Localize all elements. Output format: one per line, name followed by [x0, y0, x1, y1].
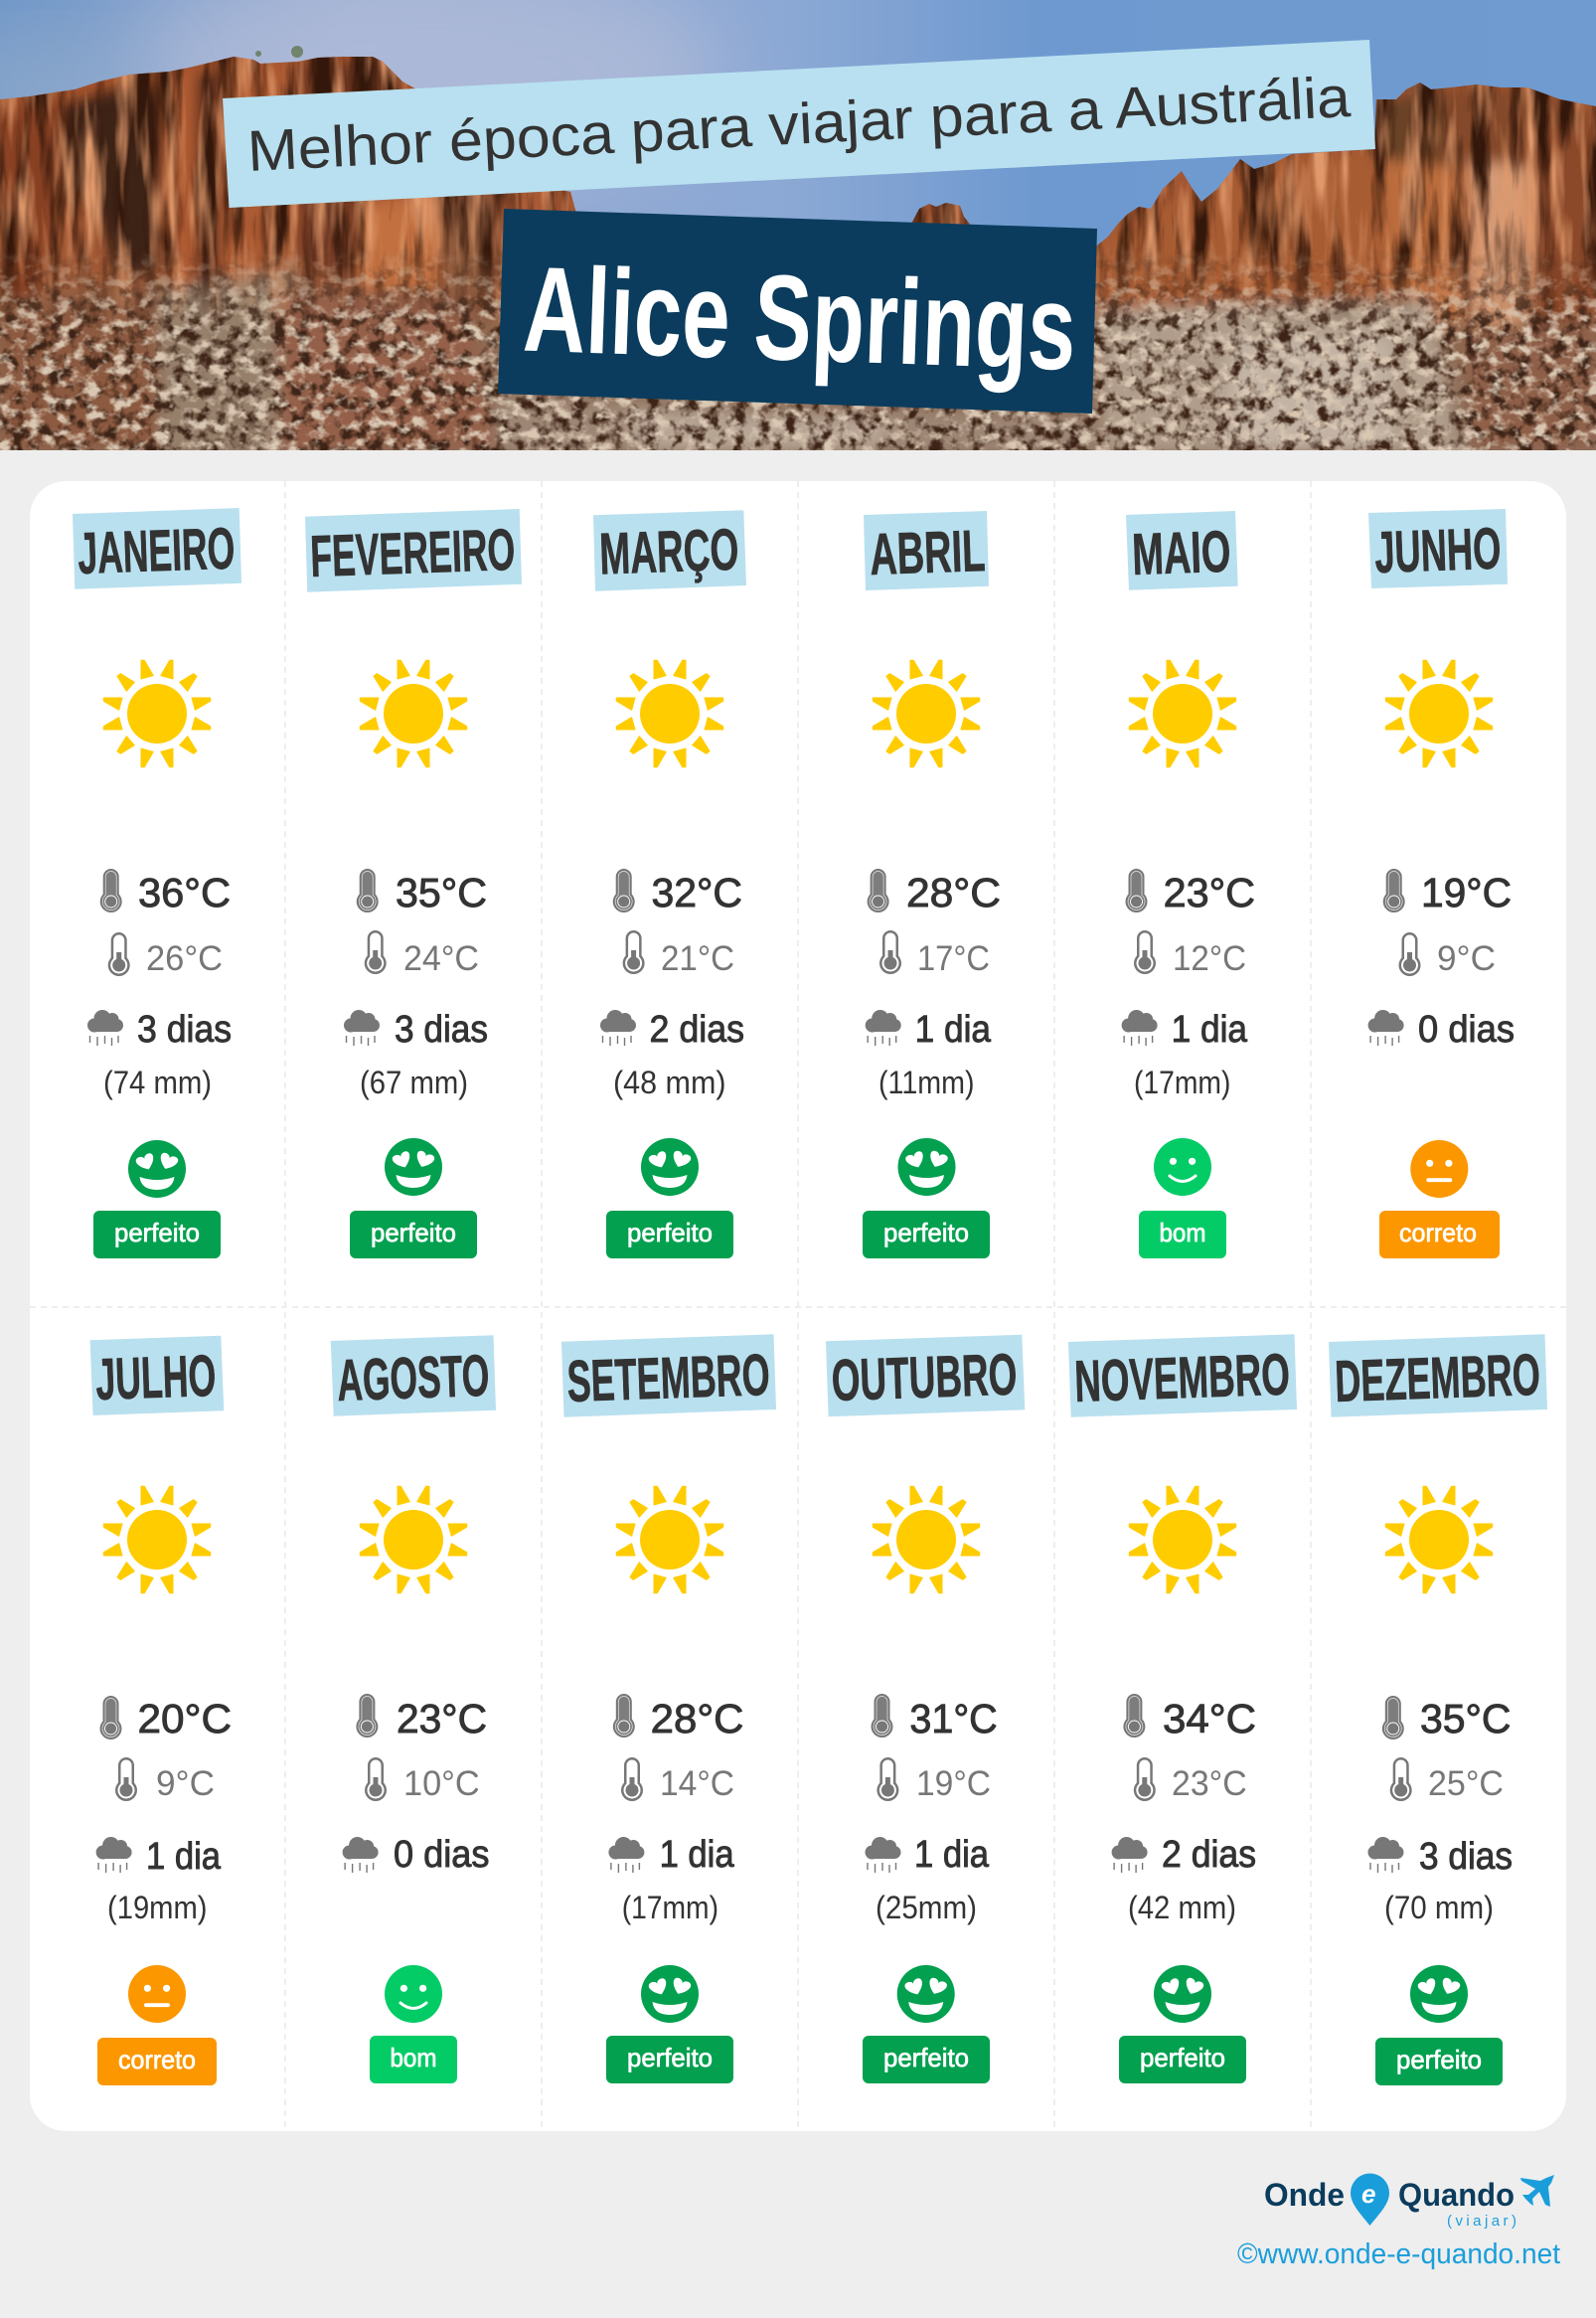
icon: thermometer low: [115, 1757, 137, 1801]
rainfall: (67 mm): [360, 1065, 468, 1100]
icon: rain cloud: [1122, 1010, 1158, 1046]
minimum temperature: 19°C: [916, 1764, 991, 1803]
rating badge: [606, 1211, 733, 1258]
icon: rating face: [128, 1140, 186, 1198]
rating badge: [370, 2036, 457, 2083]
minimum temperature: 14°C: [660, 1764, 734, 1803]
month heading: setembro: SETEMBRO: [566, 1342, 771, 1414]
rating badge: [1139, 1211, 1226, 1258]
icon: map pin: [1351, 2173, 1389, 2226]
rating badge: perfeito: [1396, 2045, 1482, 2074]
rating badge: perfeito: [114, 1218, 200, 1247]
rainfall: (42 mm): [1128, 1890, 1236, 1925]
icon: rain cloud: [1112, 1837, 1148, 1873]
icon: airplane: [1520, 2175, 1554, 2207]
column: julho: [90, 1336, 232, 2085]
icon: thermometer high: [871, 1694, 892, 1738]
column: abril: [863, 511, 1001, 1258]
header photo: red rock cliffs under a blue sky: [0, 0, 1596, 450]
icon: sun: [1385, 1486, 1493, 1593]
icon: thermometer high: [1125, 869, 1147, 912]
icon: rating face: [1410, 1965, 1468, 2023]
rainfall: (11mm): [878, 1065, 974, 1100]
icon: rain cloud: [600, 1010, 636, 1046]
rainy days: 2 dias: [1162, 1834, 1256, 1876]
icon: sun: [1385, 660, 1493, 767]
month heading: fevereiro: [305, 509, 522, 592]
icon: rating face: [641, 1965, 699, 2023]
month heading: julho: JULHO: [94, 1343, 217, 1412]
icon: thermometer high: [1382, 1696, 1404, 1739]
logo: Onde e Quando viajar: e: [1361, 2179, 1375, 2209]
minimum temperature: 25°C: [1428, 1764, 1504, 1803]
rating badge: perfeito: [1140, 2043, 1225, 2072]
icon: thermometer high: [99, 1696, 121, 1739]
icon: sun: [360, 660, 467, 767]
icon: rain cloud: [865, 1837, 900, 1873]
column: março: [593, 510, 746, 1258]
icon: thermometer low: [877, 1757, 898, 1801]
icon: thermometer low: [1134, 930, 1156, 974]
icon: thermometer low: [1134, 1757, 1156, 1801]
maximum temperature: 19°C: [1421, 870, 1512, 915]
rainy days: 2 dias: [650, 1009, 744, 1051]
minimum temperature: 21°C: [661, 939, 734, 978]
icon: thermometer high: [357, 869, 379, 912]
icon: thermometer high: [613, 1694, 635, 1738]
rainy days: 3 dias: [137, 1009, 232, 1051]
destination banner: [498, 209, 1097, 414]
month heading: junho: JUNHO: [1373, 516, 1502, 585]
rainy days: 1 dia: [146, 1836, 222, 1878]
column: maio: [1122, 511, 1255, 1258]
logo: Onde e Quando viajar: (viajar): [1447, 2213, 1516, 2230]
icon: rating face: [898, 1138, 956, 1196]
icon: thermometer low: [1390, 1757, 1412, 1801]
month heading: março: MARÇO: [598, 517, 739, 586]
rating badge: [863, 1211, 990, 1258]
rating badge: [93, 1211, 221, 1258]
icon: sun: [103, 1486, 211, 1593]
icon: sun: [616, 660, 723, 767]
icon: thermometer low: [108, 932, 130, 976]
rainy days: 0 dias: [394, 1834, 489, 1876]
rating badge: [606, 2036, 733, 2083]
month heading: abril: [864, 511, 989, 590]
month heading: junho: [1368, 509, 1508, 588]
minimum temperature: 23°C: [1172, 1764, 1247, 1803]
logo: Onde e Quando viajar: Onde: [1264, 2177, 1345, 2213]
icon: rating face: [641, 1138, 699, 1196]
minimum temperature: 10°C: [403, 1764, 480, 1803]
column: setembro: [561, 1334, 776, 2083]
maximum temperature: 28°C: [906, 870, 1001, 915]
panel: monthly climate grid: [30, 481, 1566, 2131]
month heading: maio: [1126, 511, 1238, 590]
rating badge: [1375, 2038, 1503, 2085]
rating badge: perfeito: [371, 1218, 456, 1247]
month heading: setembro: [561, 1334, 776, 1417]
icon: thermometer low: [621, 1757, 643, 1801]
rating badge: bom: [390, 2043, 437, 2072]
icon: thermometer low: [623, 930, 645, 974]
maximum temperature: 20°C: [137, 1696, 232, 1741]
icon: thermometer low: [879, 930, 901, 974]
icon: rain cloud: [87, 1010, 123, 1046]
rainy days: 3 dias: [1419, 1836, 1513, 1878]
month heading: novembro: NOVEMBRO: [1073, 1341, 1291, 1414]
column: junho: [1368, 509, 1515, 1258]
maximum temperature: 28°C: [651, 1696, 743, 1741]
icon: thermometer high: [613, 869, 635, 912]
rating badge: correto: [1399, 1218, 1477, 1247]
title banner: [223, 40, 1375, 208]
rainy days: 1 dia: [660, 1834, 734, 1876]
icon: sun: [360, 1486, 467, 1593]
month heading: julho: [90, 1336, 224, 1415]
icon: rating face: [897, 1965, 955, 2023]
icon: sun: [1129, 1486, 1236, 1593]
rainfall: (48 mm): [613, 1065, 725, 1100]
month heading: março: [593, 510, 746, 591]
maximum temperature: 35°C: [396, 870, 487, 915]
rating badge: [1119, 2036, 1246, 2083]
icon: sun: [873, 660, 980, 767]
rating badge: [1379, 1211, 1500, 1258]
rainy days: 1 dia: [914, 1834, 990, 1876]
rating badge: perfeito: [627, 2043, 713, 2072]
maximum temperature: 23°C: [397, 1696, 487, 1741]
rainy days: 3 dias: [395, 1009, 488, 1051]
website credit: ©www.onde-e-quando.net: [1237, 2238, 1560, 2270]
logo: Onde e Quando viajar: [1264, 2173, 1554, 2230]
rating badge: perfeito: [883, 2043, 969, 2072]
maximum temperature: 35°C: [1420, 1696, 1511, 1741]
rating badge: perfeito: [627, 1218, 713, 1247]
icon: thermometer high: [100, 869, 122, 912]
minimum temperature: 12°C: [1173, 939, 1246, 978]
icon: rating face: [128, 1965, 186, 2023]
rating badge: perfeito: [883, 1218, 969, 1247]
column: fevereiro: [305, 509, 522, 1258]
icon: rain cloud: [343, 1837, 379, 1873]
column: outubro: [826, 1335, 1025, 2083]
month heading: janeiro: JANEIRO: [77, 516, 236, 586]
icon: thermometer low: [365, 1757, 387, 1801]
icon: rating face: [1410, 1140, 1468, 1198]
month heading: outubro: OUTUBRO: [831, 1342, 1018, 1413]
month heading: janeiro: [73, 508, 241, 589]
title banner: Melhor época para viajar para a Austrália: [245, 65, 1353, 184]
rating badge: [350, 1211, 477, 1258]
rainfall: (70 mm): [1384, 1890, 1494, 1925]
icon: thermometer low: [1399, 932, 1421, 976]
icon: rain cloud: [1367, 1837, 1403, 1873]
icon: sun: [616, 1486, 723, 1593]
icon: rating face: [385, 1138, 442, 1196]
rating badge: bom: [1159, 1218, 1206, 1247]
icon: rating face: [385, 1965, 442, 2023]
icon: rating face: [1154, 1138, 1211, 1196]
minimum temperature: 17°C: [917, 939, 990, 978]
icon: thermometer low: [365, 930, 387, 974]
minimum temperature: 24°C: [403, 939, 479, 978]
icon: sun: [873, 1486, 980, 1593]
column: novembro: [1068, 1334, 1297, 2083]
column: agosto: [331, 1335, 496, 2083]
rating badge: [863, 2036, 990, 2083]
icon: sun: [1129, 660, 1236, 767]
icon: rating face: [1154, 1965, 1211, 2023]
icon: sun: [103, 660, 211, 767]
column: janeiro: [73, 508, 241, 1258]
month heading: outubro: [826, 1335, 1025, 1416]
maximum temperature: 34°C: [1163, 1696, 1256, 1741]
month heading: fevereiro: FEVEREIRO: [309, 517, 516, 589]
minimum temperature: 9°C: [1437, 939, 1496, 978]
rainfall: (19mm): [107, 1890, 207, 1925]
rainy days: 1 dia: [1172, 1009, 1248, 1051]
rainfall: (74 mm): [103, 1065, 212, 1100]
minimum temperature: 26°C: [146, 939, 223, 978]
maximum temperature: 36°C: [138, 870, 231, 915]
icon: rain cloud: [344, 1010, 380, 1046]
month heading: abril: ABRIL: [869, 518, 986, 587]
icon: rain cloud: [96, 1837, 132, 1873]
rainy days: 0 dias: [1418, 1009, 1515, 1051]
maximum temperature: 23°C: [1164, 870, 1255, 915]
maximum temperature: 31°C: [909, 1696, 998, 1741]
maximum temperature: 32°C: [652, 870, 742, 915]
month heading: agosto: AGOSTO: [336, 1343, 490, 1413]
month heading: maio: MAIO: [1131, 519, 1231, 587]
rating badge: [97, 2038, 217, 2085]
icon: thermometer high: [868, 869, 889, 912]
icon: thermometer high: [1123, 1694, 1145, 1738]
icon: thermometer high: [1383, 869, 1405, 912]
icon: thermometer high: [356, 1694, 378, 1738]
rating badge: correto: [118, 2045, 196, 2074]
icon: rain cloud: [866, 1010, 901, 1046]
rainfall: (25mm): [876, 1890, 977, 1925]
rainfall: (17mm): [622, 1890, 718, 1925]
icon: rain cloud: [608, 1837, 644, 1873]
destination banner: Alice Springs: [522, 242, 1078, 396]
rainfall: (17mm): [1134, 1065, 1230, 1100]
minimum temperature: 9°C: [156, 1764, 215, 1803]
column: dezembro: [1329, 1334, 1547, 2085]
month heading: novembro: [1068, 1334, 1297, 1417]
rainy days: 1 dia: [915, 1009, 992, 1051]
icon: rain cloud: [1368, 1010, 1404, 1046]
month heading: agosto: [331, 1335, 496, 1416]
logo: Onde e Quando viajar: Quando: [1398, 2177, 1515, 2213]
